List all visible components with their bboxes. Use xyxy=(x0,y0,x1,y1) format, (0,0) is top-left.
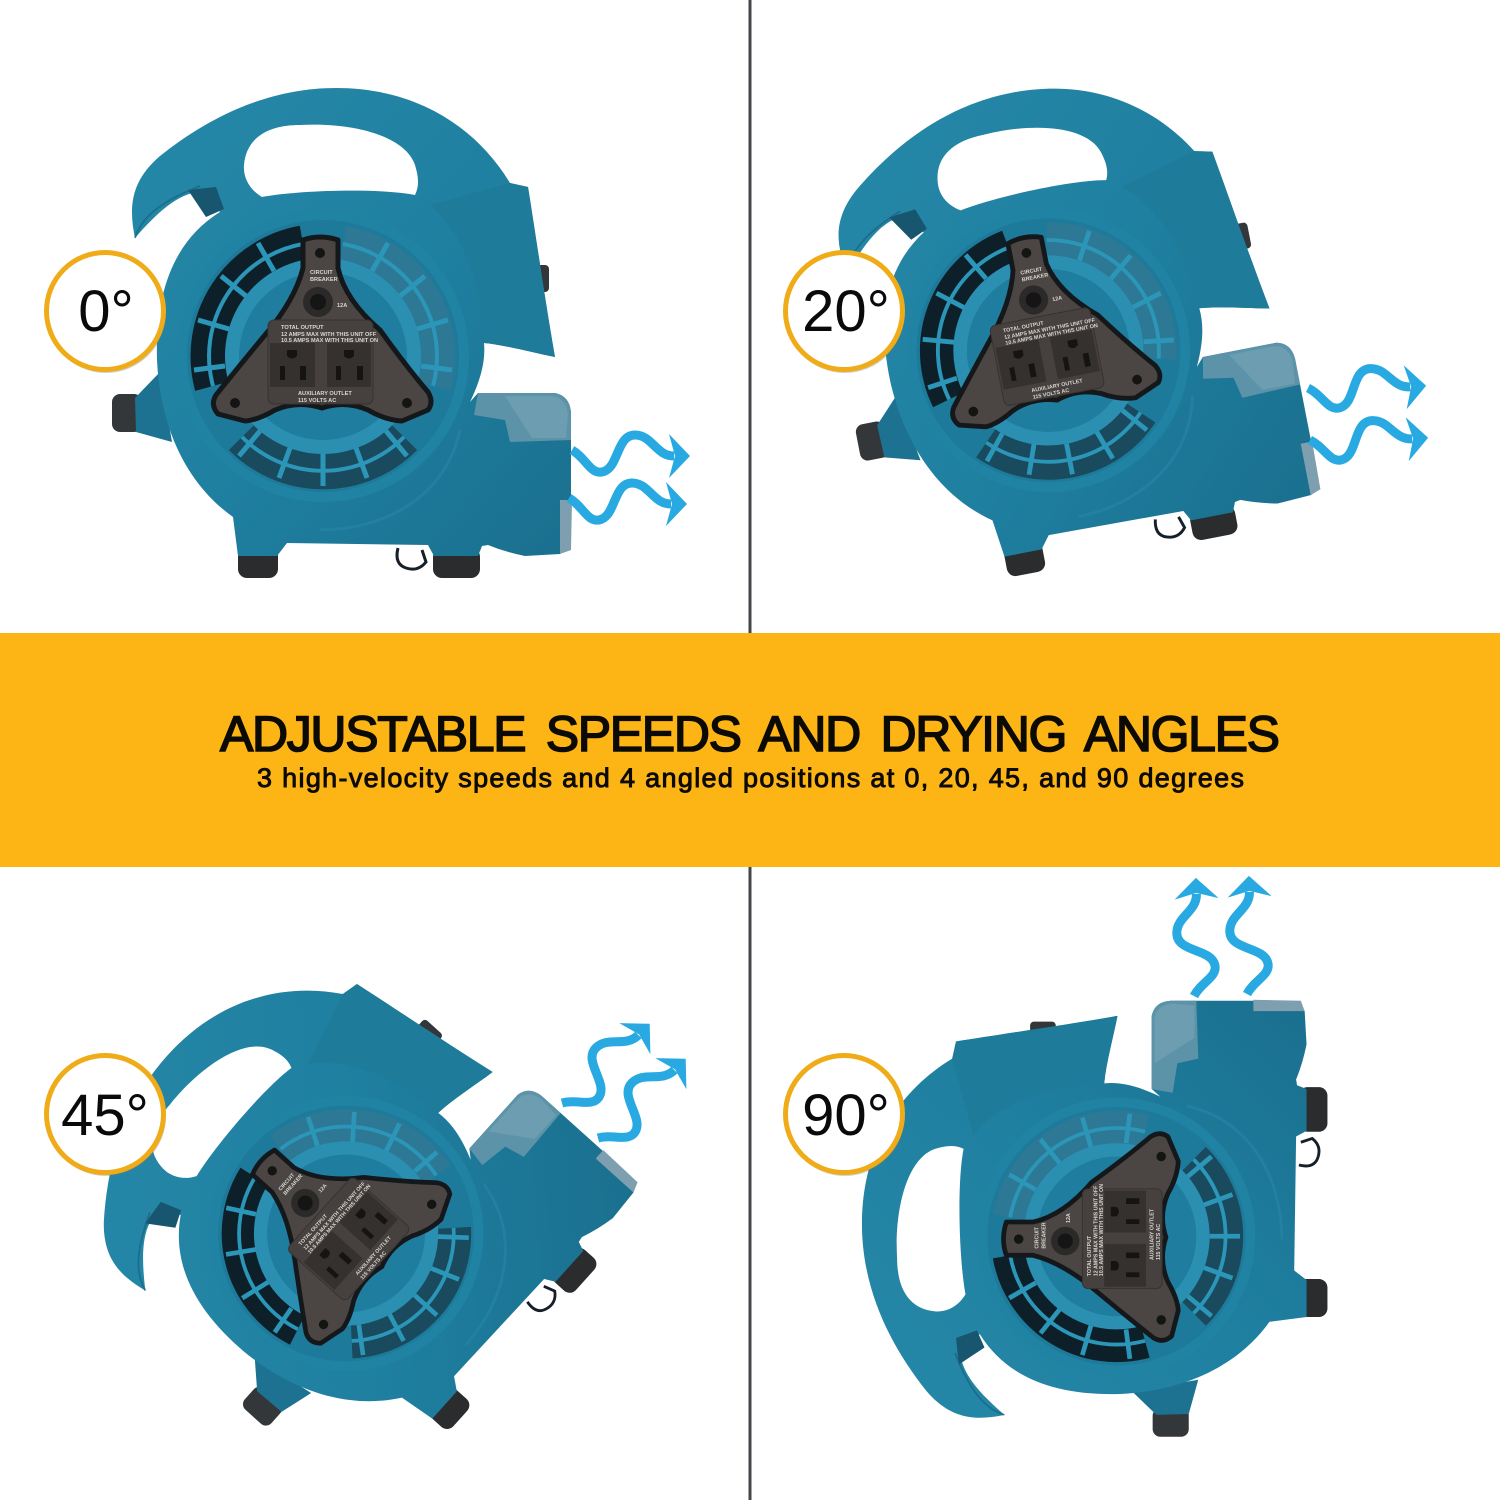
blower at 45 degrees: 115 VOLTS AC xyxy=(359,1250,388,1281)
badge: 90 degrees: 90° xyxy=(802,1083,890,1148)
blower at 0 degrees: 115 VOLTS AC xyxy=(298,398,336,404)
blower at 20 degrees: BREAKER xyxy=(1021,272,1049,283)
blower at 45 degrees: 10.5 AMPS MAX WITH THIS UNIT ON xyxy=(307,1183,372,1255)
badge: 45 degrees: 45° xyxy=(61,1083,149,1148)
blower at 20 degrees: AUXILIARY OUTLET xyxy=(1031,378,1084,394)
blower at 0 degrees: 10.5 AMPS MAX WITH THIS UNIT ON xyxy=(281,338,378,344)
blower at 20 degrees: 12 AMPS MAX WITH THIS UNIT OFF xyxy=(1004,318,1096,341)
blower at 0 degrees xyxy=(112,88,572,578)
blower at 20 degrees: 10.5 AMPS MAX WITH THIS UNIT ON xyxy=(1005,323,1099,347)
blower at 45 degrees: CIRCUIT xyxy=(278,1172,297,1192)
arrows: airflow at 90 degrees xyxy=(1174,875,1275,997)
blower at 0 degrees: AUXILIARY OUTLET xyxy=(298,391,352,397)
blower at 90 degrees: 12 AMPS MAX WITH THIS UNIT OFF xyxy=(1094,1185,1100,1276)
panel: yellow title band xyxy=(0,633,1500,867)
blower at 0 degrees: 12A xyxy=(337,303,347,309)
blower at 20 degrees: TOTAL OUTPUT xyxy=(1003,321,1045,334)
blower at 0 degrees: BREAKER xyxy=(310,277,338,283)
badge: 0 degrees: 0° xyxy=(78,279,134,344)
title: ADJUSTABLE SPEEDS AND DRYING ANGLES xyxy=(220,706,1280,762)
blower at 45 degrees: 12A xyxy=(318,1183,329,1194)
blower at 90 degrees: BREAKER xyxy=(1041,1222,1047,1249)
top vertical divider xyxy=(748,0,752,633)
arrows: airflow at 45 degrees xyxy=(551,1008,701,1158)
blower at 90 degrees: 10.5 AMPS MAX WITH THIS UNIT ON xyxy=(1099,1184,1105,1276)
blower at 90 degrees: CIRCUIT xyxy=(1035,1226,1041,1249)
blower at 20 degrees: 115 VOLTS AC xyxy=(1032,388,1070,401)
arrows: airflow at 0 degrees xyxy=(569,434,690,526)
subtitle: 3 high-velocity speeds and 4 angled positions at 0, 20, 45, and 90 degrees xyxy=(257,763,1244,793)
blower at 20 degrees: 12A xyxy=(1052,295,1063,303)
blower at 0 degrees: 12 AMPS MAX WITH THIS UNIT OFF xyxy=(281,332,377,338)
badge: 0 degrees xyxy=(46,252,166,373)
blower at 45 degrees: BREAKER xyxy=(283,1173,304,1197)
badge: 90 degrees xyxy=(785,1056,905,1176)
blower at 0 degrees: TOTAL OUTPUT xyxy=(281,325,324,331)
bottom vertical divider xyxy=(748,867,752,1500)
blower at 45 degrees: TOTAL OUTPUT xyxy=(298,1213,330,1247)
blower at 90 degrees: 115 VOLTS AC xyxy=(1156,1224,1162,1260)
badge: 45 degrees xyxy=(46,1056,166,1176)
badge: 20 degrees xyxy=(785,252,905,373)
arrows: airflow at 20 degrees xyxy=(1307,364,1430,468)
blower at 90 degrees xyxy=(862,1000,1327,1437)
blower at 0 degrees: CIRCUIT xyxy=(310,270,333,276)
blower at 20 degrees xyxy=(798,49,1327,601)
blower at 90 degrees: 12A xyxy=(1066,1213,1072,1223)
blower at 45 degrees: 12 AMPS MAX WITH THIS UNIT OFF xyxy=(303,1181,367,1252)
blower at 90 degrees: TOTAL OUTPUT xyxy=(1087,1235,1093,1276)
blower at 90 degrees: AUXILIARY OUTLET xyxy=(1150,1208,1156,1260)
blower at 45 degrees: AUXILIARY OUTLET xyxy=(355,1235,393,1277)
blower at 45 degrees xyxy=(26,891,658,1500)
badge: 20 degrees: 20° xyxy=(802,279,890,344)
blower at 20 degrees: CIRCUIT xyxy=(1020,267,1043,277)
